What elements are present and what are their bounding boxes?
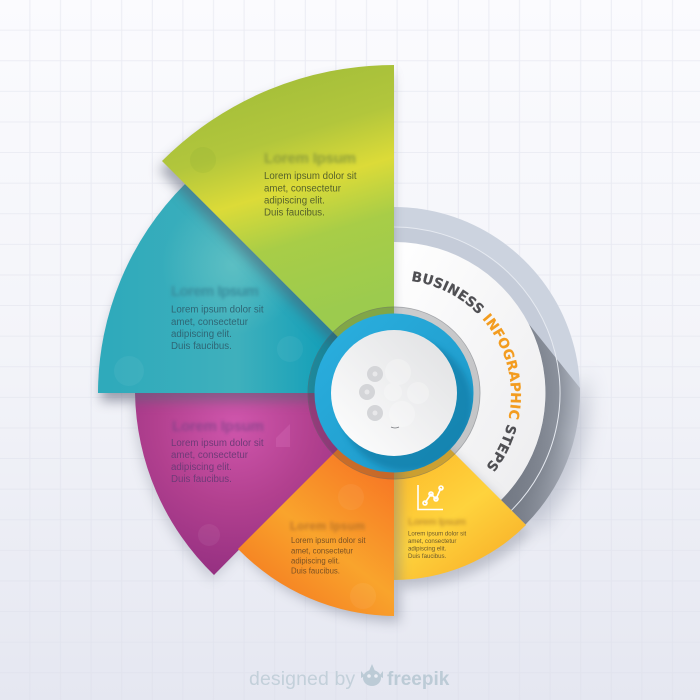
heading: yellow blurred: Lorem Ipsum — [408, 517, 466, 528]
heading: green blurred: Lorem Ipsum — [264, 150, 356, 167]
footer: designed by freepik — [249, 664, 450, 690]
faint icon: green — [190, 147, 216, 173]
text block: yellow: Lorem ipsum dolor sit — [408, 530, 467, 538]
text block: purple: Duis faucibus. — [171, 474, 232, 485]
text block: teal: Lorem ipsum dolor sit — [171, 304, 264, 316]
faint icon: bars — [276, 424, 290, 447]
panel: green sector — [159, 65, 394, 402]
text block: orange: Duis faucibus. — [291, 566, 340, 576]
text block: yellow: Duis faucibus. — [408, 553, 447, 560]
blue ring — [314, 314, 474, 472]
curved title: Business Infographic Steps: BUSINESS INFOGRAPHIC STEPS — [412, 271, 522, 472]
text block: teal: Duis faucibus. — [171, 341, 232, 352]
heading: teal blurred: Lorem Ipsum — [171, 283, 259, 300]
text block: teal: amet, consectetur — [171, 317, 249, 328]
faint icons: orange — [338, 484, 376, 609]
text block: yellow: amet, consectetur — [408, 538, 456, 545]
faint center icons — [359, 359, 429, 427]
grey back ring panel — [394, 207, 588, 532]
heading: purple blurred: Lorem Ipsum — [172, 418, 264, 435]
text block: green: Duis faucibus. — [264, 208, 325, 218]
faint icons: teal — [114, 336, 303, 386]
panel: yellow sector — [394, 393, 531, 588]
panel: teal sector — [98, 184, 397, 401]
icon: freepik mascot — [361, 664, 383, 686]
text block: purple: adipiscing elit. — [171, 462, 232, 473]
text block: orange: Lorem ipsum dolor sit — [291, 536, 366, 545]
panel: orange sector — [238, 393, 400, 622]
text block: orange: adipiscing elit. — [291, 556, 340, 566]
text block: purple: Lorem ipsum dolor sit — [171, 438, 264, 449]
center hub — [308, 306, 480, 480]
text block: yellow: adipiscing elit. — [408, 546, 447, 552]
text block: teal: adipiscing elit. — [171, 329, 232, 340]
text block: purple: amet, consectetur — [171, 450, 249, 461]
footer: designed by freepik: freepik — [387, 669, 450, 690]
heading: orange blurred: Lorem Ipsum — [290, 521, 365, 533]
footer: designed by freepik: designed by — [249, 668, 355, 690]
panel: white title sector — [394, 242, 546, 500]
text block: green: amet, consectetur — [264, 184, 342, 194]
text block: green: adipiscing elit. — [264, 196, 325, 206]
panel: purple sector — [133, 393, 394, 580]
icon: line chart — [418, 485, 443, 510]
white center disc — [331, 330, 457, 456]
text block: green: Lorem ipsum dolor sit — [264, 171, 357, 182]
text block: orange: amet, consectetur — [291, 546, 353, 555]
faint icon: gear — [198, 524, 220, 546]
